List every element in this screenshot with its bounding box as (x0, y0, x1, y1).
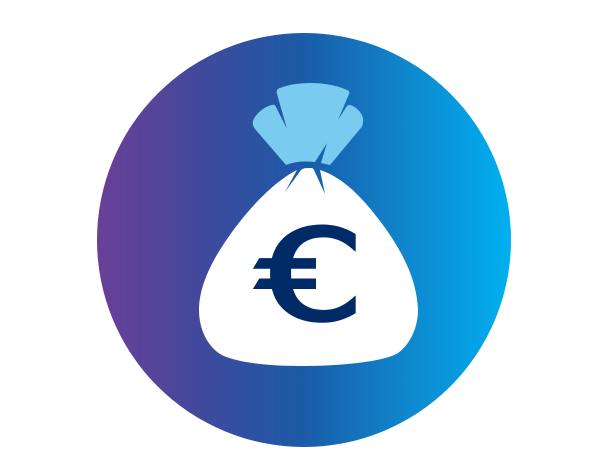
icon: bag body (199, 168, 418, 366)
icon: bag tie (253, 83, 363, 165)
gradient circle background (97, 33, 511, 447)
icon: euro symbol: € (256, 203, 365, 350)
